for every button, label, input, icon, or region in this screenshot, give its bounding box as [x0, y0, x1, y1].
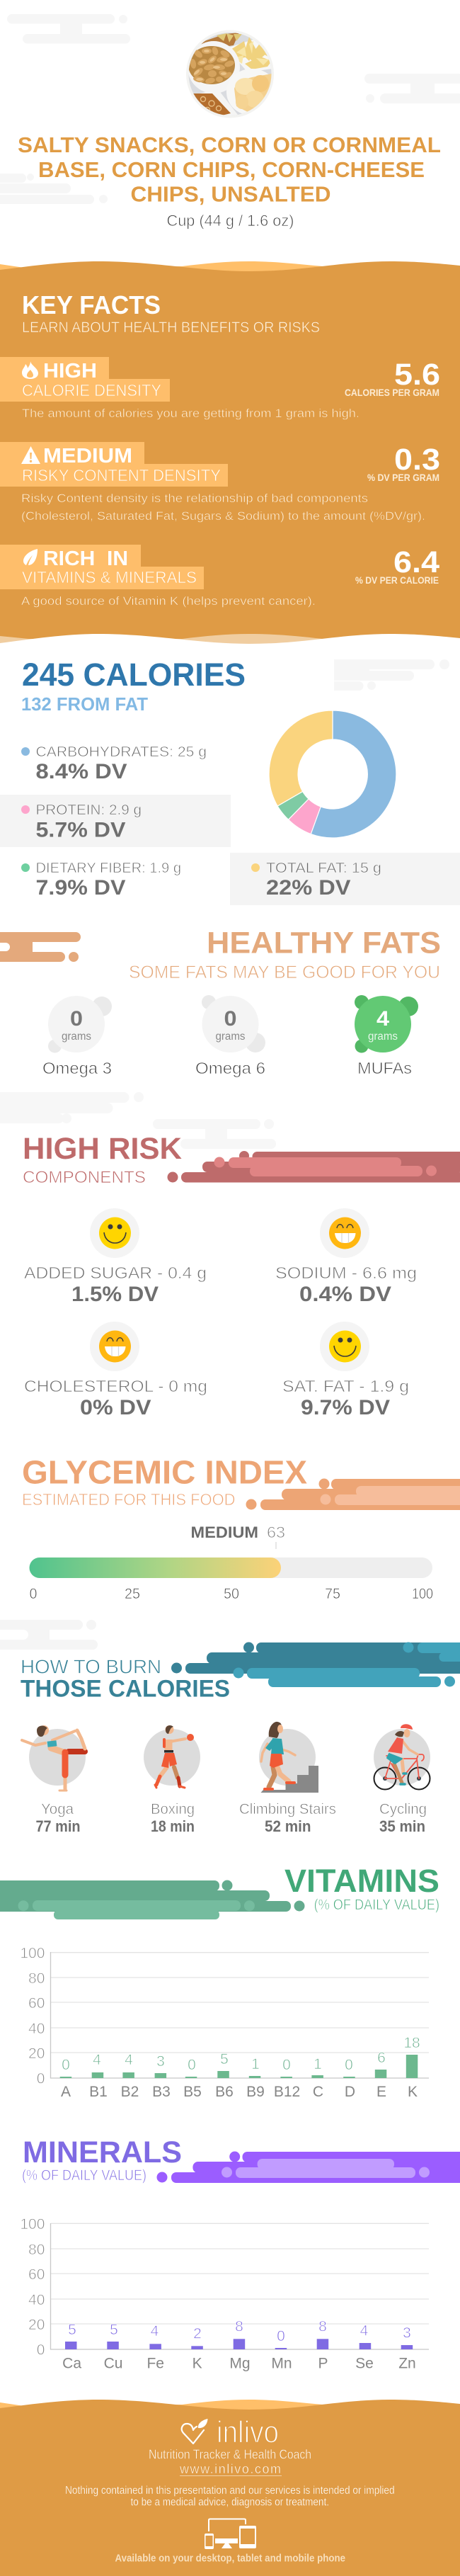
- lower left bowl: [200, 92, 238, 115]
- bar chart: minerals: 8: [318, 2319, 327, 2335]
- value: percent dv per calorie: [355, 545, 439, 586]
- value: calories per gram: [345, 358, 440, 398]
- value: calories per gram: 5.6: [394, 358, 440, 392]
- bar chart: vitamins: 40: [28, 2021, 45, 2037]
- legend: dietary fiber: DIETARY FIBER: 1.9 g: [35, 860, 181, 876]
- large bowl: [188, 41, 240, 93]
- icon: stairs: [260, 1766, 318, 1793]
- bar chart: vitamins: B9: [246, 2084, 265, 2100]
- disclaimer: to be a medical advice, diagnosis or treatment.: [130, 2497, 329, 2509]
- bar chart: minerals: 0: [277, 2328, 285, 2344]
- legend: total fat: 22% DV: [266, 876, 351, 900]
- bar chart: vitamins: B6: [215, 2084, 234, 2100]
- bar chart: vitamins: D: [345, 2084, 355, 2100]
- metric: omega 6: [195, 995, 265, 1077]
- bar chart: vitamins: 18: [403, 2035, 420, 2051]
- value: calories per gram: CALORIES PER GRAM: [345, 387, 439, 398]
- bar chart: vitamins: 100: [20, 1945, 45, 1962]
- bar chart: vitamins: B1: [89, 2084, 108, 2100]
- glycemic value label: [191, 1524, 285, 1549]
- icon: cyclist figure: [374, 1724, 430, 1789]
- component: sodium: 0.4% DV: [299, 1283, 391, 1306]
- upper right bowl: [231, 40, 271, 71]
- component: saturated fat: 9.7% DV: [301, 1396, 390, 1419]
- text: risky content description: (Cholesterol, Saturated Fat, Sugars & Sodium) to the amount (%DV/gr).: [21, 509, 425, 523]
- label: yoga: Yoga: [41, 1801, 74, 1817]
- medium label: MEDIUM: [43, 445, 132, 467]
- legend row background: protein: [0, 795, 231, 847]
- legend: total fat: TOTAL FAT: 15 g: [266, 860, 381, 876]
- activity: cycling: [374, 1724, 430, 1789]
- legend row background: total fat: [230, 853, 460, 905]
- bar chart: minerals: 0: [37, 2342, 45, 2359]
- calories from fat: 132 FROM FAT: [21, 693, 148, 715]
- gauge scale: 25: [125, 1586, 140, 1602]
- label: cycling: Cycling: [379, 1801, 427, 1817]
- component: cholesterol: [24, 1322, 207, 1419]
- panel: vitamins: [0, 1863, 439, 2100]
- bar chart: vitamins: 0: [282, 2057, 291, 2073]
- activity: yoga: [22, 1725, 86, 1791]
- value: percent dv per gram: 0.3: [394, 443, 440, 477]
- bar chart: vitamins: [20, 1945, 429, 2100]
- metric: omega 6: 0: [224, 1007, 236, 1031]
- bar chart: minerals: Mn: [271, 2355, 292, 2371]
- bar chart: vitamins: 3: [156, 2053, 165, 2070]
- text: calorie density description: The amount of calories you are getting from 1 gram is high.: [22, 407, 360, 420]
- label: cycling: [379, 1801, 427, 1835]
- component: saturated fat: [282, 1322, 409, 1419]
- logo: inlivo: inlivo: [217, 2415, 279, 2449]
- donut chart: [269, 710, 396, 838]
- icon: flame: [22, 361, 38, 379]
- background cloud: burn: [0, 1620, 98, 1650]
- icon: grin emoji: [329, 1217, 361, 1249]
- bar chart: minerals: 4: [360, 2323, 369, 2339]
- text: risky content description: [21, 492, 425, 523]
- serving size: Cup (44 g / 1.6 oz): [167, 212, 294, 229]
- activity: boxing: [144, 1725, 200, 1788]
- bar chart: vitamins: C: [313, 2084, 323, 2100]
- high label: HIGH: [43, 360, 97, 382]
- background clouds: header: [0, 14, 460, 204]
- vitamins subheading: (% OF DAILY VALUE): [314, 1897, 439, 1913]
- bar chart: vitamins: 0: [345, 2057, 353, 2073]
- bar chart: minerals: 100: [20, 2216, 45, 2232]
- tagline: Nutrition Tracker & Health Coach: [149, 2448, 311, 2462]
- component: saturated fat: SAT. FAT - 1.9 g: [282, 1377, 409, 1395]
- panel: key facts: [0, 261, 460, 655]
- footer wave: [0, 2400, 460, 2576]
- highlight: medium risky content density: [0, 442, 228, 487]
- decorative bars: minerals: [157, 2152, 460, 2183]
- bar chart: minerals: Fe: [146, 2355, 164, 2371]
- glycemic value label: MEDIUM: [191, 1524, 258, 1541]
- how to burn heading: HOW TO BURN: [21, 1656, 161, 1677]
- bar chart: vitamins: 4: [93, 2052, 101, 2068]
- text: risky content description: Risky Content density is the relationship of bad components: [21, 492, 368, 505]
- top pretzels and chips: [201, 33, 239, 46]
- high risk heading: HIGH RISK: [23, 1132, 182, 1166]
- bar chart: vitamins: K: [408, 2084, 418, 2100]
- panel: glycemic index: [22, 1453, 460, 1602]
- component: sodium: SODIUM - 6.6 mg: [275, 1264, 417, 1282]
- bar chart: minerals: K: [192, 2355, 202, 2371]
- title: CHIPS, UNSALTED: [130, 181, 331, 207]
- bottom wave: [0, 634, 460, 655]
- lower right bowl: [226, 69, 269, 113]
- rich in label: RICH IN: [43, 547, 128, 570]
- bar chart: vitamins: 80: [28, 1970, 45, 1987]
- bar chart: minerals: 4: [151, 2323, 159, 2339]
- icon: climber figure: [261, 1722, 295, 1789]
- food photo: [186, 30, 274, 118]
- icon: warning triangle: [21, 446, 40, 464]
- label: boxing: Boxing: [151, 1801, 195, 1817]
- icon: devices: [205, 2519, 256, 2549]
- label: boxing: [151, 1801, 195, 1835]
- bar chart: minerals: [20, 2216, 429, 2371]
- icon: yoga figure: [22, 1725, 85, 1791]
- bar chart: minerals: Zn: [398, 2355, 416, 2371]
- bar chart: minerals: Ca: [62, 2355, 81, 2371]
- bar chart: minerals: P: [318, 2355, 328, 2371]
- metric: omega 3: 0: [70, 1007, 83, 1031]
- bar chart: vitamins: B3: [152, 2084, 171, 2100]
- calories heading: 245 CALORIES: [22, 657, 246, 693]
- gauge scale: 0: [30, 1586, 37, 1602]
- bar chart: minerals: 5: [68, 2322, 76, 2338]
- label: boxing: 18 min: [151, 1817, 195, 1835]
- website link: www.inlivo.com: [179, 2462, 281, 2476]
- panel: minerals: [20, 2135, 460, 2371]
- those calories heading: THOSE CALORIES: [21, 1676, 230, 1703]
- label: cycling: 35 min: [379, 1817, 425, 1835]
- bar chart: minerals: 20: [28, 2317, 45, 2333]
- label: climbing stairs: [239, 1801, 336, 1835]
- bar chart: minerals: 5: [110, 2322, 118, 2338]
- gauge scale: 75: [325, 1586, 340, 1602]
- metric: omega 3: grams: [62, 1031, 91, 1043]
- availability note: Available on your desktop, tablet and mobile phone: [115, 2553, 345, 2565]
- legend: protein: PROTEIN: 2.9 g: [35, 802, 142, 818]
- bar chart: vitamins: B2: [121, 2084, 139, 2100]
- label: climbing stairs: 52 min: [265, 1817, 311, 1835]
- legend: dietary fiber: 7.9% DV: [35, 876, 126, 900]
- minerals subheading: (% OF DAILY VALUE): [22, 2167, 146, 2184]
- bar chart: vitamins: B12: [274, 2084, 300, 2100]
- background clouds: high risk: [0, 1092, 276, 1149]
- bar chart: vitamins: 6: [377, 2050, 386, 2066]
- high risk subheading: COMPONENTS: [23, 1168, 146, 1187]
- decorative bars: healthy fats: [0, 932, 81, 962]
- panel: healthy fats: [0, 926, 441, 1077]
- healthy fats heading: HEALTHY FATS: [207, 926, 441, 960]
- bar chart: minerals: 3: [403, 2325, 411, 2342]
- legend: total fat: [251, 860, 381, 900]
- calorie density label: CALORIE DENSITY: [22, 381, 161, 399]
- panel: calories: [0, 657, 460, 905]
- bar chart: minerals: 60: [28, 2266, 45, 2283]
- component: cholesterol: 0% DV: [80, 1396, 151, 1419]
- component: added sugar: [24, 1208, 207, 1306]
- metric: mufas: grams: [368, 1031, 398, 1043]
- component: sodium: [275, 1208, 417, 1306]
- bar chart: minerals: 8: [235, 2319, 243, 2335]
- disclaimer: [65, 2485, 395, 2509]
- bar chart: minerals: 40: [28, 2292, 45, 2308]
- top wave: [0, 261, 460, 648]
- key facts heading: KEY FACTS: [22, 290, 161, 319]
- icon: boxer figure: [155, 1725, 194, 1788]
- bar chart: vitamins: 0: [37, 2071, 45, 2087]
- bar chart: vitamins: 4: [125, 2052, 133, 2068]
- value: percent dv per calorie: 6.4: [393, 545, 439, 579]
- title: [18, 132, 441, 207]
- metric: mufas: 4: [376, 1007, 389, 1031]
- icon: smile emoji: [99, 1217, 131, 1249]
- background cloud: calories: [334, 659, 449, 691]
- legend: protein: 5.7% DV: [35, 819, 126, 841]
- healthy fats subheading: SOME FATS MAY BE GOOD FOR YOU: [129, 963, 440, 982]
- glycemic index heading: GLYCEMIC INDEX: [22, 1453, 307, 1490]
- component: added sugar: 1.5% DV: [71, 1283, 159, 1306]
- decorative bars: burn: [171, 1642, 460, 1687]
- legend: dietary fiber: [21, 860, 181, 900]
- highlight: rich in vitamins and minerals: [0, 545, 204, 589]
- metric: omega 6: Omega 6: [195, 1059, 265, 1077]
- activity: climbing stairs: [259, 1722, 318, 1793]
- panel: how to burn those calories: [21, 1642, 460, 1835]
- logo: inlivo: [182, 2415, 279, 2449]
- label: yoga: [35, 1801, 81, 1835]
- text: vitamins description: A good source of Vitamin K (helps prevent cancer).: [21, 594, 316, 608]
- bar chart: minerals: Cu: [104, 2355, 122, 2371]
- decorative bars: vitamins: [0, 1880, 304, 1919]
- bar chart: minerals: 80: [28, 2242, 45, 2258]
- gauge scale: 100: [412, 1586, 433, 1602]
- bar chart: vitamins: 1: [251, 2056, 260, 2072]
- metric: mufas: MUFAs: [357, 1059, 412, 1077]
- bar chart: minerals: Se: [355, 2355, 374, 2371]
- legend: carbohydrates: 8.4% DV: [35, 760, 127, 783]
- glycemic gauge: [30, 1557, 432, 1578]
- value: percent dv per gram: [367, 443, 440, 483]
- legend: carbohydrates: [21, 744, 207, 783]
- metric: mufas: [355, 995, 418, 1077]
- glycemic value label: 63: [267, 1524, 285, 1541]
- icon: smile emoji: [329, 1330, 361, 1363]
- metric: omega 3: [42, 996, 112, 1077]
- panel: high risk components: [23, 1132, 460, 1419]
- icon: leaf: [23, 549, 38, 565]
- gauge scale: 50: [224, 1586, 239, 1602]
- bar chart: vitamins: A: [61, 2084, 71, 2100]
- bar chart: vitamins: E: [376, 2084, 386, 2100]
- component: added sugar: ADDED SUGAR - 0.4 g: [24, 1264, 207, 1282]
- glycemic index subheading: ESTIMATED FOR THIS FOOD: [22, 1490, 235, 1509]
- disclaimer: Nothing contained in this presentation and our services is intended or implied: [65, 2485, 395, 2497]
- key facts subheading: LEARN ABOUT HEALTH BENEFITS OR RISKS: [22, 319, 320, 336]
- bar chart: minerals: Mg: [229, 2355, 251, 2371]
- value: percent dv per gram: % DV PER GRAM: [367, 472, 439, 483]
- panel: footer: [0, 2400, 460, 2576]
- icon: grin emoji: [99, 1330, 131, 1363]
- legend: protein: [21, 802, 142, 841]
- bar chart: vitamins: 60: [28, 1995, 45, 2012]
- title: BASE, CORN CHIPS, CORN-CHEESE: [38, 157, 425, 182]
- decorative bars: high risk: [167, 1151, 460, 1183]
- bar chart: minerals: 2: [193, 2326, 202, 2342]
- bar chart: vitamins: 5: [220, 2051, 229, 2067]
- bar chart: vitamins: 1: [314, 2056, 322, 2072]
- risky content density label: RISKY CONTENT DENSITY: [22, 466, 221, 484]
- bar chart: vitamins: 0: [62, 2057, 70, 2073]
- highlight: high calorie density: [0, 357, 170, 402]
- label: yoga: 77 min: [35, 1817, 81, 1835]
- title: SALTY SNACKS, CORN OR CORNMEAL: [18, 132, 441, 157]
- vitamins and minerals label: VITAMINS & MINERALS: [22, 568, 197, 586]
- component: cholesterol: CHOLESTEROL - 0 mg: [24, 1377, 207, 1395]
- bar chart: vitamins: 0: [188, 2057, 196, 2073]
- decorative bars: glycemic index: [246, 1479, 460, 1510]
- value: percent dv per calorie: % DV PER CALORIE: [355, 574, 439, 586]
- gauge scale: [30, 1586, 433, 1602]
- bar chart: vitamins: B5: [183, 2084, 202, 2100]
- legend: carbohydrates: CARBOHYDRATES: 25 g: [35, 744, 207, 760]
- minerals heading: MINERALS: [23, 2135, 182, 2169]
- metric: omega 6: grams: [215, 1031, 246, 1043]
- vitamins heading: VITAMINS: [284, 1863, 439, 1899]
- bar chart: vitamins: 20: [28, 2046, 45, 2062]
- metric: omega 3: Omega 3: [42, 1059, 112, 1077]
- label: climbing stairs: Climbing Stairs: [239, 1801, 336, 1817]
